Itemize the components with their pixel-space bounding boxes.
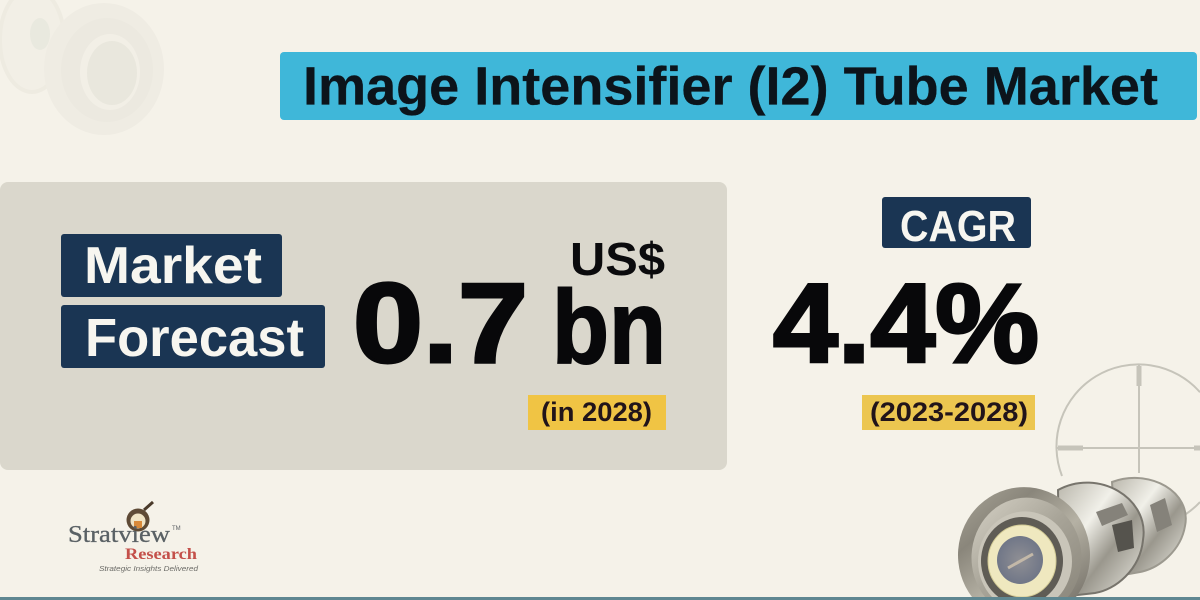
panel: market forecast [0,182,727,470]
rear flange [1112,478,1186,576]
logo: Stratview Research: Research [125,546,197,563]
icon: crosshair [1056,364,1200,514]
period tag: (2023-2028) [870,397,1028,427]
logo: Stratview Research: TM [172,526,181,532]
label: Market: Market [84,237,262,295]
CAGR label: CAGR [900,202,1016,251]
unit: bn: bn [552,270,666,386]
illustration: image intensifier tube [958,478,1186,597]
value: 0.7: 0.7 [353,260,528,386]
label: Forecast: Forecast [85,308,304,368]
middle barrel shadows [1096,503,1128,526]
logo icon [126,502,153,532]
front flange [958,487,1090,597]
middle flange [1058,483,1144,597]
logo: Stratview Research [68,502,199,573]
logo: Stratview Research: Stratview [68,522,171,548]
front flange ring [971,498,1082,597]
label: Market [61,234,282,297]
value: CAGR percentage: 4.4% [773,261,1039,386]
faded tube watermark [0,0,164,135]
lens [997,536,1043,584]
year tag: in 2028: (in 2028) [541,397,652,427]
bottom stripe [0,597,1200,600]
year tag: in 2028 [528,395,666,430]
rear barrel shadow [1150,498,1172,532]
cream ring [988,525,1056,597]
unit: US$: US$ [570,233,665,285]
logo: Stratview Research: Strategic Insights Delivered [99,564,199,573]
title banner: Image Intensifier (I2) Tube Market [303,56,1158,116]
dark ring [981,517,1063,597]
